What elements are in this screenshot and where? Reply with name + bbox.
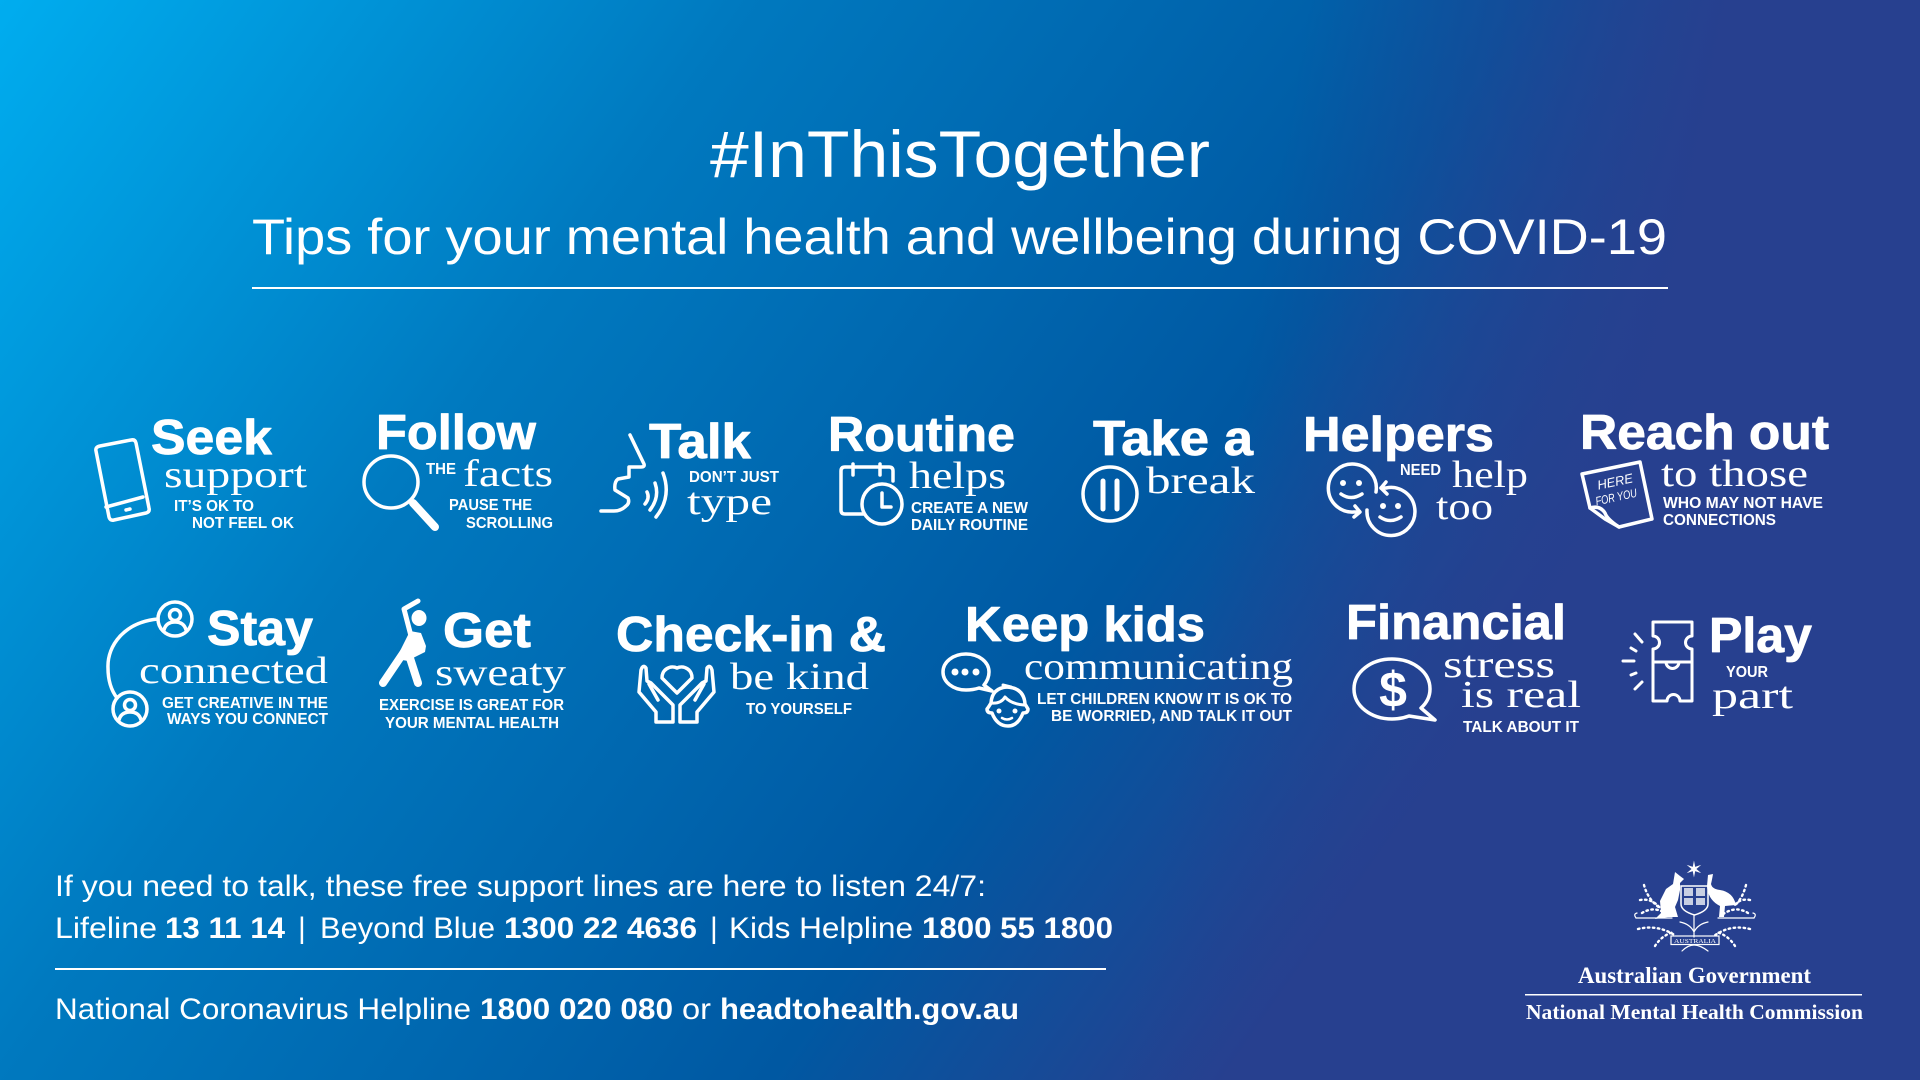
caption: BE WORRIED, AND TALK IT OUT [1051, 708, 1293, 725]
caption: WAYS YOU CONNECT [167, 711, 329, 728]
caption [449, 497, 553, 532]
heading: Seek: Seek [151, 411, 273, 465]
icon: phone [96, 440, 149, 520]
caption: WHO MAY NOT HAVE [1663, 495, 1823, 512]
caption: TO YOURSELF [746, 701, 852, 718]
support line numbers [55, 912, 1113, 945]
slab: communicating: communicating [1024, 646, 1293, 688]
heading: Get: Get [443, 604, 531, 658]
heading: Play: Play [1709, 609, 1812, 663]
caption [162, 695, 329, 728]
tip: play your part [1623, 609, 1812, 717]
icon: two smiling faces [1328, 464, 1415, 535]
slab: part: part [1712, 675, 1794, 717]
tip: take a break [1083, 412, 1255, 521]
slab: connected: connected [139, 650, 328, 692]
logo text: National Mental Health Commission: National Mental Health Commission [1526, 1000, 1863, 1024]
caption: PAUSE THE [449, 497, 532, 514]
tip: helpers need help too [1303, 408, 1528, 535]
icon: magnifier [364, 456, 435, 527]
heading: Follow: Follow [376, 406, 537, 460]
support lines intro: If you need to talk, these free support lines are here to listen 24/7: [55, 870, 986, 903]
icon: calendar and clock [841, 464, 902, 524]
heading: Helpers: Helpers [1303, 408, 1494, 462]
icon: puzzle pieces and rays [1623, 622, 1692, 701]
tip: get sweaty [379, 601, 566, 732]
coronavirus helpline: headtohealth.gov.au [720, 993, 1019, 1026]
coronavirus helpline: National Coronavirus Helpline [55, 993, 471, 1026]
tip: talk don't just type [601, 415, 780, 523]
subtitle: Tips for your mental health and wellbeing during COVID-19 [252, 209, 1667, 265]
heading: Financial: Financial [1346, 596, 1566, 650]
caption [379, 697, 564, 732]
heading: Check-in &: Check-in & [616, 608, 886, 662]
caption: CONNECTIONS [1663, 512, 1776, 529]
crest: emu [1707, 874, 1736, 917]
tip: stay connected [108, 602, 329, 728]
icon: dollar speech bubble [1354, 659, 1435, 720]
tip: financial stress [1346, 596, 1581, 736]
logo: Australian Government crest [1635, 857, 1755, 951]
caption: SCROLLING [466, 515, 553, 532]
heading: Talk: Talk [649, 415, 752, 469]
support line numbers: 13 11 14 [165, 912, 285, 945]
caption: GET CREATIVE IN THE [162, 695, 328, 712]
label: the: THE [426, 461, 456, 478]
coronavirus helpline: or [682, 993, 711, 1026]
support line numbers: 1300 22 4636 [504, 912, 697, 945]
heading: Reach out: Reach out [1580, 406, 1829, 460]
slab: type: type [687, 481, 772, 523]
icon: sticky note [1582, 462, 1652, 527]
tip: routine helps [828, 408, 1028, 534]
slab: stress: stress [1443, 644, 1555, 686]
slab: to those: to those [1661, 453, 1808, 495]
icon: speaking face [601, 435, 666, 517]
title: #InThisTogether [710, 117, 1210, 191]
tip: seek support [96, 411, 308, 532]
label: your: YOUR [1726, 664, 1768, 681]
slab: is real: is real [1461, 674, 1581, 716]
crest: star: ✶ [1685, 857, 1703, 882]
caption: NOT FEEL OK [192, 515, 295, 532]
icon: sticky note: HERE [1596, 470, 1635, 493]
crest: kangaroo [1655, 872, 1684, 919]
caption [174, 498, 295, 532]
tip: keep kids communicating [943, 598, 1293, 726]
icon: pause [1083, 467, 1137, 521]
caption: LET CHILDREN KNOW IT IS OK TO [1037, 691, 1292, 708]
tip: reach out to those [1580, 406, 1829, 529]
heading: Keep kids: Keep kids [965, 598, 1205, 652]
slab: help: help [1452, 454, 1528, 496]
caption: TALK ABOUT IT [1463, 719, 1580, 736]
slab: support: support [164, 454, 308, 496]
crest: shield [1681, 886, 1708, 915]
coronavirus helpline: 1800 020 080 [480, 993, 673, 1026]
crest: wattle sprigs [1635, 885, 1755, 951]
slab: sweaty: sweaty [435, 652, 566, 694]
heading: Take a: Take a [1093, 412, 1254, 466]
heading: Stay: Stay [207, 602, 313, 656]
support line numbers: Beyond Blue [320, 912, 495, 945]
icon: hands and heart [639, 666, 714, 722]
support line numbers: 1800 55 1800 [922, 912, 1113, 945]
icon: connected people [108, 602, 192, 726]
caption: IT’S OK TO [174, 498, 254, 515]
tip: follow the facts [364, 406, 553, 532]
support line numbers: Kids Helpline [729, 912, 913, 945]
caption: DAILY ROUTINE [911, 517, 1028, 534]
icon: dollar speech bubble: $ [1379, 662, 1407, 718]
slab: break: break [1146, 460, 1255, 502]
heading: Routine: Routine [828, 408, 1015, 462]
coronavirus helpline [55, 993, 1019, 1026]
icon: sticky note: FOR YOU [1594, 486, 1638, 508]
slab: helps: helps [909, 455, 1006, 497]
icon: speech bubble and child [943, 654, 1028, 726]
caption: YOUR MENTAL HEALTH [385, 715, 559, 732]
caption [911, 500, 1028, 534]
crest: scroll: AUSTRALIA [1674, 938, 1716, 945]
icon: stretching figure [383, 601, 426, 683]
caption [1037, 691, 1293, 725]
tip: check-in and be kind [616, 608, 886, 722]
support line numbers: | [298, 912, 306, 945]
caption: CREATE A NEW [911, 500, 1028, 517]
slab: facts: facts [463, 453, 553, 495]
caption [1663, 495, 1823, 529]
label: need: NEED [1400, 462, 1441, 479]
support line numbers: Lifeline [55, 912, 157, 945]
caption: DON’T JUST [689, 469, 780, 486]
logo text: Australian Government: Australian Government [1578, 963, 1811, 988]
slab: be kind: be kind [730, 656, 869, 698]
support line numbers: | [710, 912, 718, 945]
slab: too: too [1436, 486, 1493, 528]
caption: EXERCISE IS GREAT FOR [379, 697, 564, 714]
